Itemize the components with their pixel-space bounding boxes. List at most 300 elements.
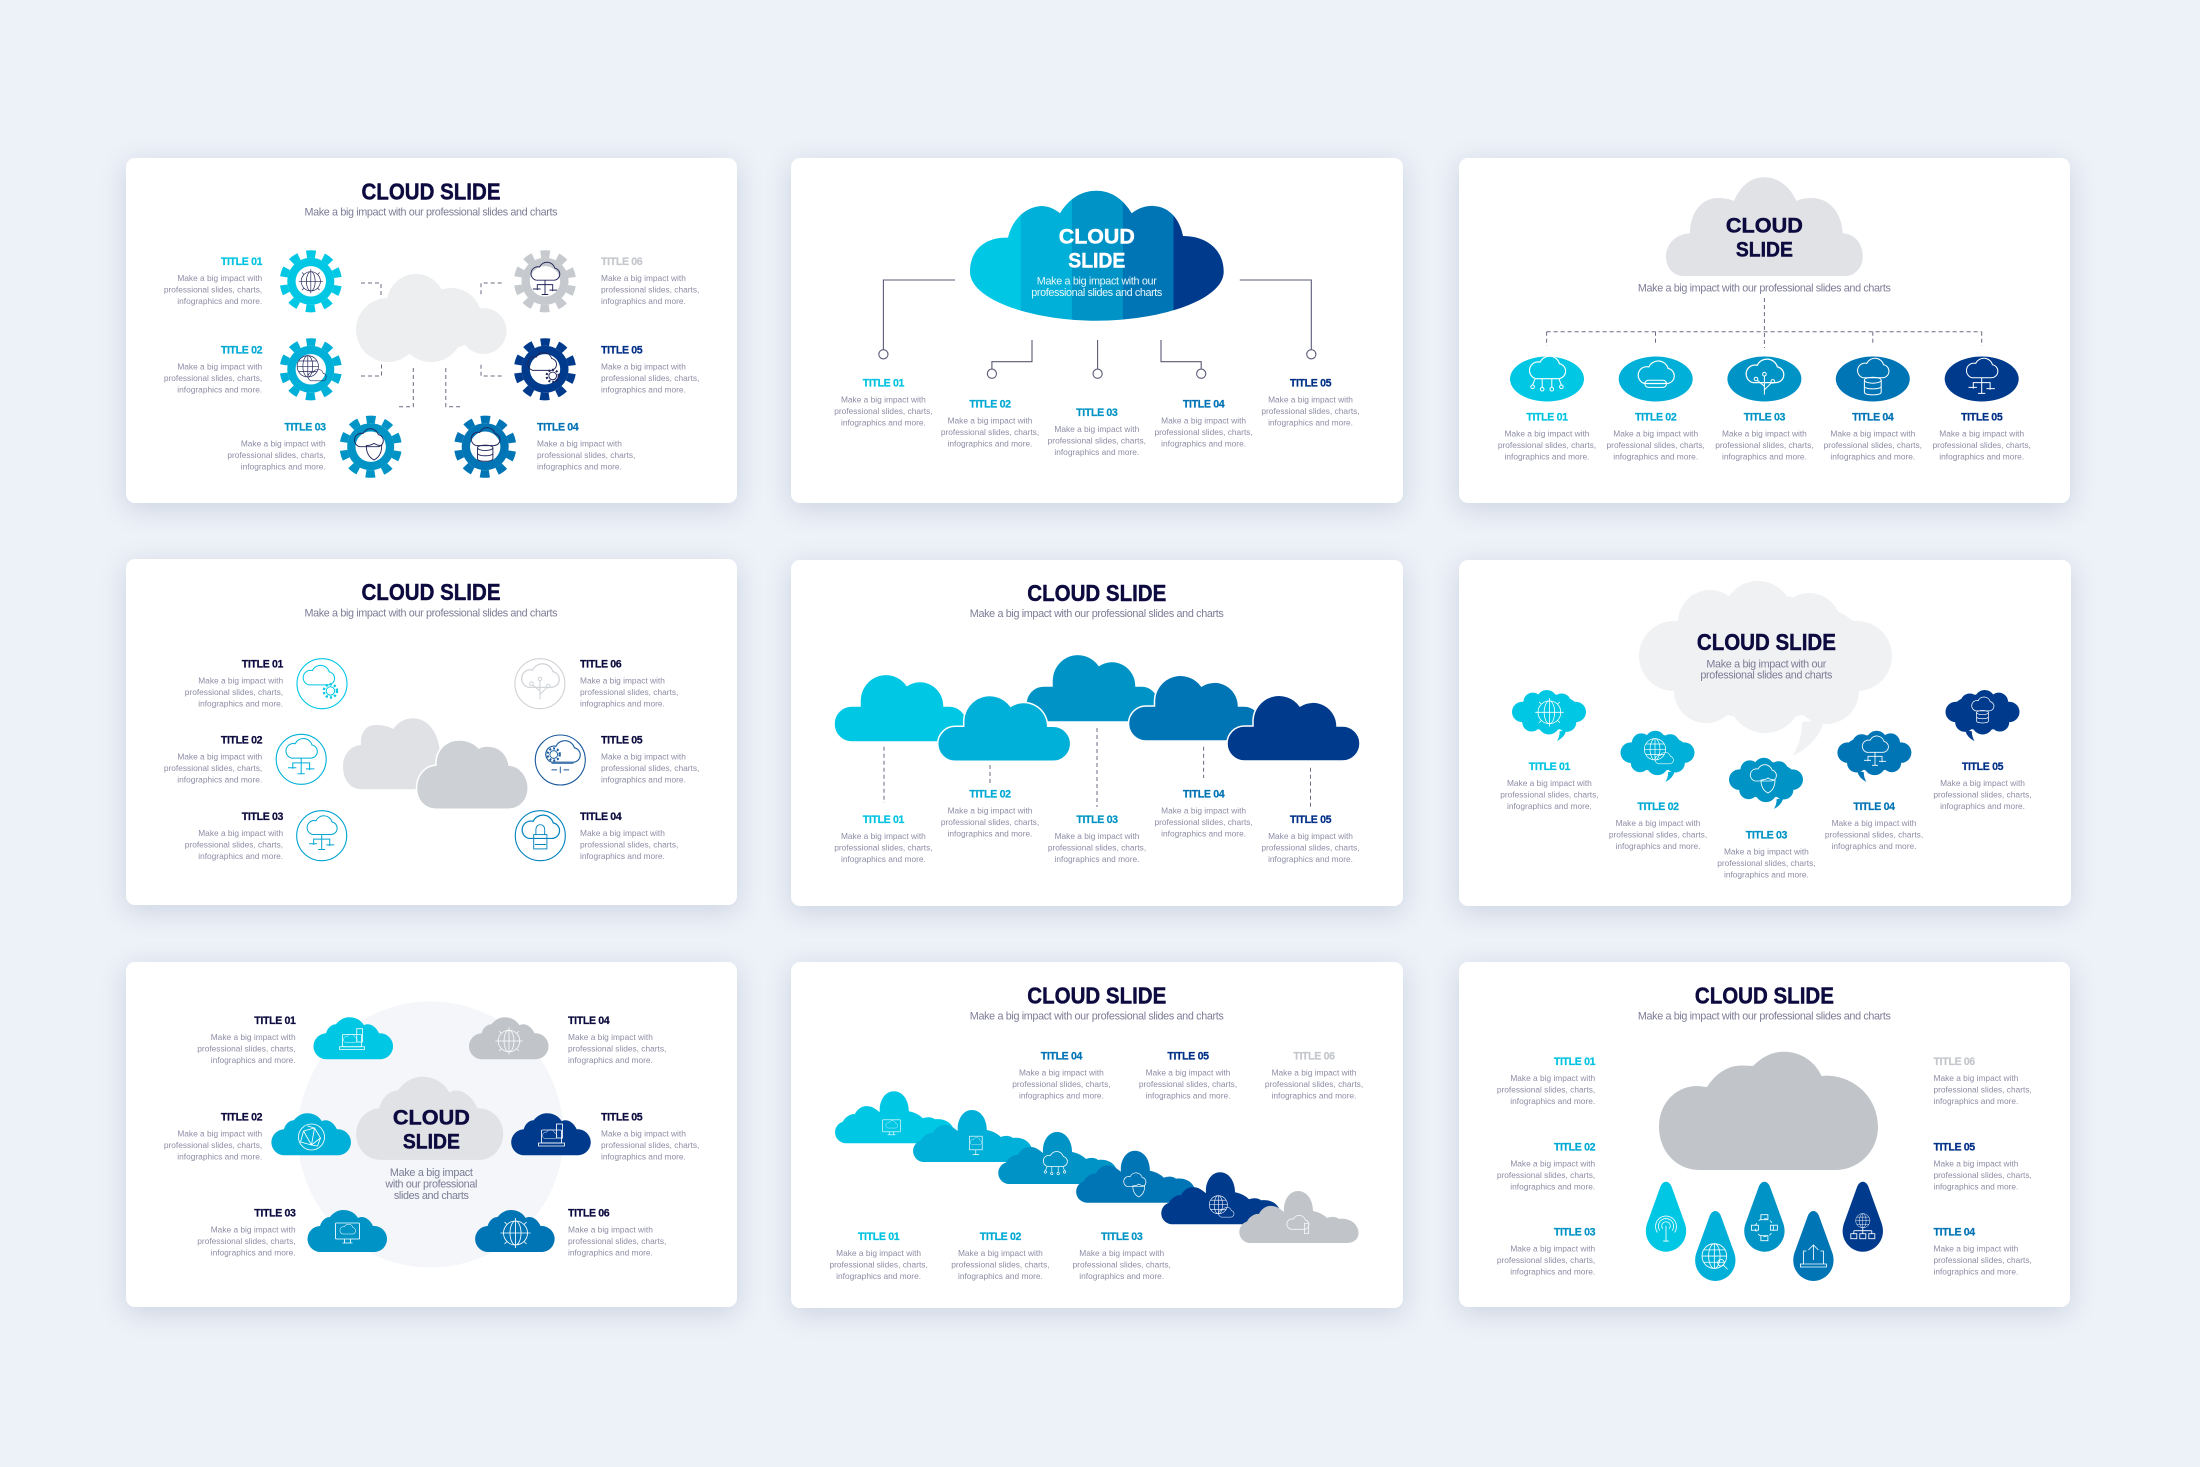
text: title 05: Make a big impact with [1268, 831, 1353, 841]
text: title 05 [1261, 378, 1360, 428]
text: title 02: infographics and more. [958, 1271, 1043, 1281]
cloud icon 04 [469, 1017, 549, 1059]
subtitle: Make a big impact with our professional slides and charts [1638, 1011, 1891, 1023]
text: title 05: professional slides, charts, [601, 763, 699, 773]
text: title 02: Make a big impact with [1616, 818, 1701, 828]
text: title 04: Make a big impact with [1830, 429, 1916, 439]
text: title 05 [601, 344, 699, 394]
two grey clouds [343, 718, 528, 809]
text: title 01 [1498, 412, 1596, 462]
text: title 05: Make a big impact with [1934, 1158, 2019, 1168]
text: title 04 [568, 1015, 666, 1065]
text: title 01 [1497, 1056, 1596, 1106]
text: title 06 [568, 1208, 666, 1258]
text: title 06: infographics and more. [601, 296, 686, 306]
text: title 01: Make a big impact with [841, 395, 926, 405]
text: title 02 [941, 789, 1039, 839]
text: title 03: infographics and more. [1054, 447, 1139, 457]
text: title 03 [1715, 412, 1814, 462]
text: title 04: TITLE 04 [1852, 412, 1894, 424]
text: title 02 [164, 1111, 263, 1161]
text: title 05 [1933, 761, 2032, 811]
text: title 03: professional slides, charts, [1715, 440, 1814, 450]
text: title 06: professional slides, charts, [1934, 1084, 2032, 1094]
text: title 03: Make a big impact with [1054, 424, 1140, 434]
bubble 03 [1729, 758, 1803, 809]
title: CLOUD SLIDE [362, 579, 500, 605]
title: CLOUD SLIDE [362, 178, 500, 204]
text: title 01: Make a big impact with [841, 831, 926, 841]
text: title 05: infographics and more. [601, 1151, 686, 1161]
text: title 05: TITLE 05 [1961, 412, 2003, 424]
text: title 05 [1261, 814, 1360, 864]
text: title 06 [580, 659, 678, 709]
center heading [393, 1106, 470, 1154]
step cloud 02 [913, 1110, 1032, 1162]
subtitle: Make a big impact with our [1706, 658, 1827, 670]
dashed connectors [361, 283, 502, 407]
grey rain cloud [1659, 1052, 1878, 1170]
subtitle: Make a big impact with our professional slides and charts [304, 206, 558, 218]
center subtitle: slides and charts [394, 1190, 469, 1202]
icon oval 04 [1836, 356, 1910, 402]
text: title 02: Make a big impact with [948, 415, 1033, 425]
title: CLOUD SLIDE [1695, 982, 1834, 1008]
text: title 02: Make a big impact with [177, 362, 263, 372]
text: title 04: TITLE 04 [1183, 789, 1225, 801]
text: title 02: infographics and more. [177, 1151, 262, 1161]
text: title 03: TITLE 03 [1101, 1231, 1143, 1243]
text: title 03: Make a big impact with [1510, 1244, 1596, 1254]
text: title 05: Make a big impact with [601, 1128, 686, 1138]
text: title 01: professional slides, charts, [1500, 790, 1599, 800]
text: title 05: professional slides, charts, [1933, 440, 2031, 450]
panel: hierarchy cloud slide [1459, 158, 2070, 503]
cloud heading: CLOUD [1726, 214, 1803, 237]
icon circle 01 [297, 659, 347, 709]
text: title 06: Make a big impact with [601, 273, 686, 283]
text: title 05: TITLE 05 [1934, 1141, 1975, 1153]
text: title 02: Make a big impact with [177, 752, 263, 762]
text: title 06: infographics and more. [1934, 1096, 2018, 1106]
cloud icon 05 [511, 1113, 591, 1155]
text: title 02: Make a big impact with [177, 1128, 263, 1138]
text: title 05: TITLE 05 [601, 735, 643, 747]
text: title 05: infographics and more. [1939, 452, 2024, 462]
text: title 05 [1933, 412, 2031, 462]
text: title 04: Make a big impact with [1934, 1244, 2019, 1254]
text: title 06: professional slides, charts, [580, 687, 678, 697]
text: title 06 [1934, 1056, 2032, 1106]
text: title 04: Make a big impact with [537, 439, 622, 449]
text: title 03: Make a big impact with [1722, 429, 1807, 439]
text: title 02: infographics and more. [1510, 1181, 1595, 1191]
text: title 06: Make a big impact with [1934, 1073, 2019, 1083]
text: title 01: professional slides, charts, [834, 842, 933, 852]
text: title 02: infographics and more. [177, 384, 262, 394]
text: title 03: professional slides, charts, [1048, 842, 1146, 852]
text: title 02: TITLE 02 [221, 735, 263, 747]
icon circle 06 [515, 659, 565, 709]
icon oval 03 [1727, 356, 1801, 402]
text: title 02: TITLE 02 [1635, 412, 1677, 424]
text: title 06: infographics and more. [1272, 1090, 1356, 1100]
text: title 06: Make a big impact with [568, 1225, 653, 1235]
text: title 01: professional slides, charts, [185, 687, 283, 697]
text: title 04: TITLE 04 [568, 1015, 610, 1027]
text: title 05: TITLE 05 [1962, 761, 2004, 773]
text: title 01: Make a big impact with [836, 1248, 921, 1258]
cloud subtitle [1031, 276, 1163, 299]
text: title 04: professional slides, charts, [1012, 1079, 1111, 1089]
step cloud 04 [1076, 1151, 1195, 1203]
text: title 04: TITLE 04 [1183, 398, 1225, 410]
text: title 04: Make a big impact with [1019, 1067, 1104, 1077]
text: title 03: TITLE 03 [1076, 407, 1118, 419]
text: title 04: infographics and more. [1161, 829, 1246, 839]
step cloud 05 [1161, 1172, 1281, 1224]
text: title 04 [580, 811, 678, 861]
text: title 03: professional slides, charts, [1073, 1260, 1171, 1270]
connector 02 [987, 340, 1032, 378]
cloud subtitle: Make a big impact with our [1037, 276, 1157, 288]
background circle [298, 1002, 564, 1268]
step cloud 03 [998, 1132, 1118, 1184]
text: title 04: Make a big impact with [568, 1032, 653, 1042]
text: title 01: TITLE 01 [242, 659, 284, 671]
text: title 04: infographics and more. [1830, 452, 1915, 462]
text: title 01: infographics and more. [177, 296, 262, 306]
text: title 02: professional slides, charts, [164, 1140, 262, 1150]
text: title 01: TITLE 01 [221, 256, 263, 268]
text: title 01 [1500, 761, 1599, 811]
text: title 01: infographics and more. [836, 1271, 921, 1281]
text: title 03: TITLE 03 [1744, 412, 1786, 424]
subtitle: Make a big impact with our professional slides and charts [970, 1011, 1224, 1023]
text: title 01: Make a big impact with [1507, 778, 1592, 788]
connector 01 [879, 280, 955, 359]
text: title 01: Make a big impact with [211, 1032, 296, 1042]
step cloud 06 [1239, 1191, 1359, 1243]
cloud heading [1726, 214, 1803, 262]
cloud icon 03 [307, 1210, 387, 1252]
cloud subtitle: professional slides and charts [1031, 287, 1163, 299]
text: title 02: professional slides, charts, [941, 427, 1039, 437]
text: title 02: infographics and more. [1616, 841, 1700, 851]
icon circle 04 [515, 811, 565, 861]
center heading: SLIDE [403, 1131, 460, 1154]
text: title 01: infographics and more. [1505, 452, 1589, 462]
text: title 05: Make a big impact with [1268, 395, 1353, 405]
text: title 03: professional slides, charts, [1717, 858, 1816, 868]
text: title 02: Make a big impact with [1613, 429, 1698, 439]
text: title 05: TITLE 05 [1167, 1050, 1209, 1062]
text: title 02: Make a big impact with [1510, 1158, 1596, 1168]
text: title 04: professional slides, charts, [1825, 830, 1923, 840]
text: title 03: TITLE 03 [1076, 814, 1118, 826]
text: title 04 [1934, 1227, 2032, 1277]
cloud heading [1059, 225, 1135, 273]
cloud icon 06 [475, 1210, 555, 1252]
cloud heading: SLIDE [1736, 239, 1793, 262]
text: title 04 [1012, 1050, 1111, 1100]
text: title 03: TITLE 03 [242, 811, 284, 823]
text: title 06 [601, 256, 699, 306]
cloud heading: SLIDE [1068, 250, 1125, 273]
text: title 05: professional slides, charts, [1934, 1170, 2032, 1180]
text: title 02 [1609, 801, 1707, 851]
icon oval 02 [1619, 356, 1693, 402]
text: title 05: Make a big impact with [1146, 1067, 1231, 1077]
center grey cloud [356, 1077, 503, 1160]
text: title 05: infographics and more. [1934, 1181, 2018, 1191]
center subtitle [384, 1167, 477, 1202]
panel: descending clouds slide [791, 962, 1403, 1308]
text: title 03: infographics and more. [1079, 1271, 1164, 1281]
text: title 01: TITLE 01 [863, 814, 905, 826]
text: title 02: TITLE 02 [969, 789, 1011, 801]
text: title 02: Make a big impact with [958, 1248, 1043, 1258]
text: title 02 [951, 1231, 1050, 1281]
grey heading cloud [1666, 177, 1863, 276]
panel: speech bubble clouds slide [1459, 560, 2071, 906]
subtitle: Make a big impact with our professional slides and charts [970, 608, 1224, 620]
text: title 05 [601, 735, 699, 785]
text: title 04: infographics and more. [568, 1055, 653, 1065]
title: CLOUD SLIDE [1027, 580, 1166, 606]
connector 05 [1240, 280, 1316, 359]
text: title 04: professional slides, charts, [1154, 817, 1253, 827]
text: title 04 [1825, 801, 1923, 851]
text: title 05: TITLE 05 [1290, 378, 1332, 390]
text: title 03 [1048, 407, 1146, 457]
text: title 01 [829, 1231, 928, 1281]
panel: radial clouds slide [126, 962, 737, 1307]
text: title 01: TITLE 01 [858, 1231, 900, 1243]
text: title 06: TITLE 06 [1934, 1056, 1975, 1068]
text: title 05: professional slides, charts, [1139, 1079, 1237, 1089]
text: title 03 [1497, 1227, 1596, 1277]
text: title 04: TITLE 04 [1853, 801, 1895, 813]
text: title 01 [164, 256, 263, 306]
text: title 06: TITLE 06 [568, 1208, 610, 1220]
text: title 02: infographics and more. [948, 438, 1032, 448]
text: title 05: Make a big impact with [601, 362, 686, 372]
drop 04 [1793, 1211, 1834, 1281]
text: title 04: infographics and more. [537, 462, 622, 472]
text: title 04: professional slides, charts, [568, 1044, 666, 1054]
text: title 01: Make a big impact with [1510, 1073, 1596, 1083]
text: title 06: TITLE 06 [601, 256, 643, 268]
text: title 03 [185, 811, 284, 861]
text: title 01: professional slides, charts, [1498, 440, 1596, 450]
text: title 06: professional slides, charts, [568, 1236, 666, 1246]
text: title 03: Make a big impact with [1055, 831, 1140, 841]
text: title 02: professional slides, charts, [951, 1260, 1050, 1270]
text: title 04: professional slides, charts, [1824, 440, 1922, 450]
text: title 02: infographics and more. [177, 775, 262, 785]
icon circle 02 [276, 734, 326, 784]
text: title 05: TITLE 05 [1290, 814, 1332, 826]
text: title 02: professional slides, charts, [1497, 1170, 1595, 1180]
text: title 02: TITLE 02 [221, 344, 263, 356]
text: title 04 [1154, 398, 1253, 448]
text: title 01: professional slides, charts, [829, 1260, 928, 1270]
text: title 03 [197, 1208, 296, 1258]
big speech cloud [1639, 581, 1892, 756]
text: title 04: TITLE 04 [1041, 1050, 1083, 1062]
text: title 04: professional slides, charts, [1154, 427, 1253, 437]
subtitle: Make a big impact with our professional slides and charts [304, 608, 558, 620]
text: title 05: TITLE 05 [601, 1111, 643, 1123]
text: title 06: infographics and more. [580, 699, 665, 709]
text: title 04: infographics and more. [1019, 1090, 1104, 1100]
text: title 01 [185, 659, 284, 709]
striped cloud [970, 190, 1224, 321]
text: title 06: Make a big impact with [1272, 1067, 1357, 1077]
text: title 04: infographics and more. [580, 851, 665, 861]
text: title 02: TITLE 02 [1554, 1141, 1596, 1153]
text: title 04: professional slides, charts, [537, 450, 635, 460]
text: title 02 [1497, 1141, 1596, 1191]
text: title 04 [1154, 789, 1253, 839]
text: title 05: professional slides, charts, [1261, 842, 1360, 852]
cloud icon 01 [313, 1017, 393, 1059]
text: title 01: professional slides, charts, [197, 1044, 296, 1054]
text: title 05: Make a big impact with [601, 752, 686, 762]
text: title 05: infographics and more. [1146, 1090, 1230, 1100]
text: title 04: Make a big impact with [1832, 818, 1917, 828]
text: title 05: infographics and more. [601, 384, 686, 394]
text: title 01: infographics and more. [211, 1055, 296, 1065]
panel: outline icons cloud slide [126, 559, 737, 905]
text: title 04: TITLE 04 [537, 422, 579, 434]
title: CLOUD SLIDE [1697, 629, 1836, 655]
step cloud 01 [835, 1091, 954, 1143]
text: title 06 [1265, 1050, 1363, 1100]
text: title 03: infographics and more. [1510, 1267, 1595, 1277]
text: title 06: TITLE 06 [580, 659, 622, 671]
text: title 03: professional slides, charts, [1497, 1255, 1595, 1265]
center subtitle: with our professional [384, 1178, 477, 1190]
text: title 01: Make a big impact with [198, 676, 283, 686]
text: title 02 [941, 398, 1039, 448]
text: title 01: infographics and more. [198, 699, 283, 709]
gear 06 [514, 250, 576, 313]
text: title 02 [164, 344, 263, 394]
gear 02 [280, 338, 342, 401]
text: title 04: infographics and more. [1161, 438, 1246, 448]
text: title 01 [834, 378, 933, 428]
text: title 03 [1073, 1231, 1171, 1281]
cloud icon 02 [271, 1113, 351, 1155]
overlapping cloud row [834, 654, 1360, 761]
text: title 03: infographics and more. [1722, 452, 1807, 462]
text: title 02: infographics and more. [1613, 452, 1698, 462]
text: title 02: professional slides, charts, [164, 763, 262, 773]
icon circle 03 [297, 811, 347, 861]
text: title 03: infographics and more. [198, 851, 283, 861]
text: title 05: infographics and more. [1268, 418, 1353, 428]
drop 05 [1843, 1182, 1883, 1252]
text: title 04: professional slides, charts, [1934, 1255, 2032, 1265]
text: title 02: infographics and more. [948, 829, 1032, 839]
panel: overlapping clouds slide [791, 560, 1403, 906]
text: title 05: Make a big impact with [1939, 429, 2024, 439]
text: title 01: professional slides, charts, [834, 406, 933, 416]
text: title 05: professional slides, charts, [601, 1140, 699, 1150]
text: title 01: professional slides, charts, [164, 284, 262, 294]
text: title 03: TITLE 03 [284, 422, 326, 434]
text: title 03: professional slides, charts, [185, 840, 283, 850]
text: title 03: Make a big impact with [1079, 1248, 1164, 1258]
gear 05 [514, 338, 576, 401]
dashed stems [884, 728, 1310, 807]
text: title 03 [1717, 829, 1816, 879]
text: title 04: Make a big impact with [580, 828, 665, 838]
text: title 03: professional slides, charts, [227, 450, 326, 460]
text: title 06: Make a big impact with [580, 676, 665, 686]
text: title 02 [1607, 412, 1705, 462]
gear 03 [339, 415, 402, 478]
text: title 03: TITLE 03 [254, 1208, 296, 1220]
text: title 01 [197, 1015, 296, 1065]
cloud heading: CLOUD [1059, 225, 1135, 248]
text: title 05: infographics and more. [1268, 854, 1353, 864]
panel: gear cloud slide [126, 158, 737, 503]
text: title 03 [1048, 814, 1146, 864]
connector 04 [1161, 340, 1206, 378]
text: title 02: Make a big impact with [948, 806, 1033, 816]
text: title 03: Make a big impact with [1724, 846, 1809, 856]
drop 02 [1695, 1211, 1735, 1281]
text: title 05: professional slides, charts, [601, 373, 699, 383]
connector 03 [1093, 340, 1102, 378]
central cloud [356, 274, 506, 362]
text: title 02: professional slides, charts, [941, 817, 1039, 827]
bubble 01 [1512, 690, 1586, 741]
text: title 03 [227, 422, 326, 472]
text: title 05: professional slides, charts, [1933, 790, 2032, 800]
text: title 05: Make a big impact with [1940, 778, 2025, 788]
text: title 05 [1934, 1141, 2032, 1191]
text: title 04: Make a big impact with [1161, 806, 1246, 816]
text: title 01: professional slides, charts, [1497, 1084, 1595, 1094]
text: title 02: TITLE 02 [1637, 801, 1679, 813]
drop 03 [1744, 1182, 1785, 1252]
text: title 02: professional slides, charts, [164, 373, 262, 383]
icon oval 05 [1945, 356, 2019, 402]
text: title 03: Make a big impact with [198, 828, 283, 838]
text: title 01: TITLE 01 [863, 378, 905, 390]
center heading: CLOUD [393, 1106, 470, 1129]
text: title 04: TITLE 04 [580, 811, 622, 823]
text: title 05: professional slides, charts, [1261, 406, 1360, 416]
text: title 05: infographics and more. [1940, 801, 2025, 811]
text: title 06: infographics and more. [568, 1248, 653, 1258]
panel: striped cloud slide [791, 158, 1403, 503]
text: title 03: TITLE 03 [1746, 829, 1788, 841]
panel: rain cloud slide [1459, 962, 2070, 1307]
text: title 02: TITLE 02 [980, 1231, 1022, 1243]
icon oval 01 [1510, 356, 1584, 402]
text: title 04: infographics and more. [1934, 1267, 2018, 1277]
text: title 03: TITLE 03 [1554, 1227, 1596, 1239]
title: CLOUD SLIDE [1027, 982, 1166, 1008]
text: title 03: professional slides, charts, [197, 1236, 296, 1246]
text: title 01 [834, 814, 933, 864]
gear 01 [280, 250, 342, 313]
